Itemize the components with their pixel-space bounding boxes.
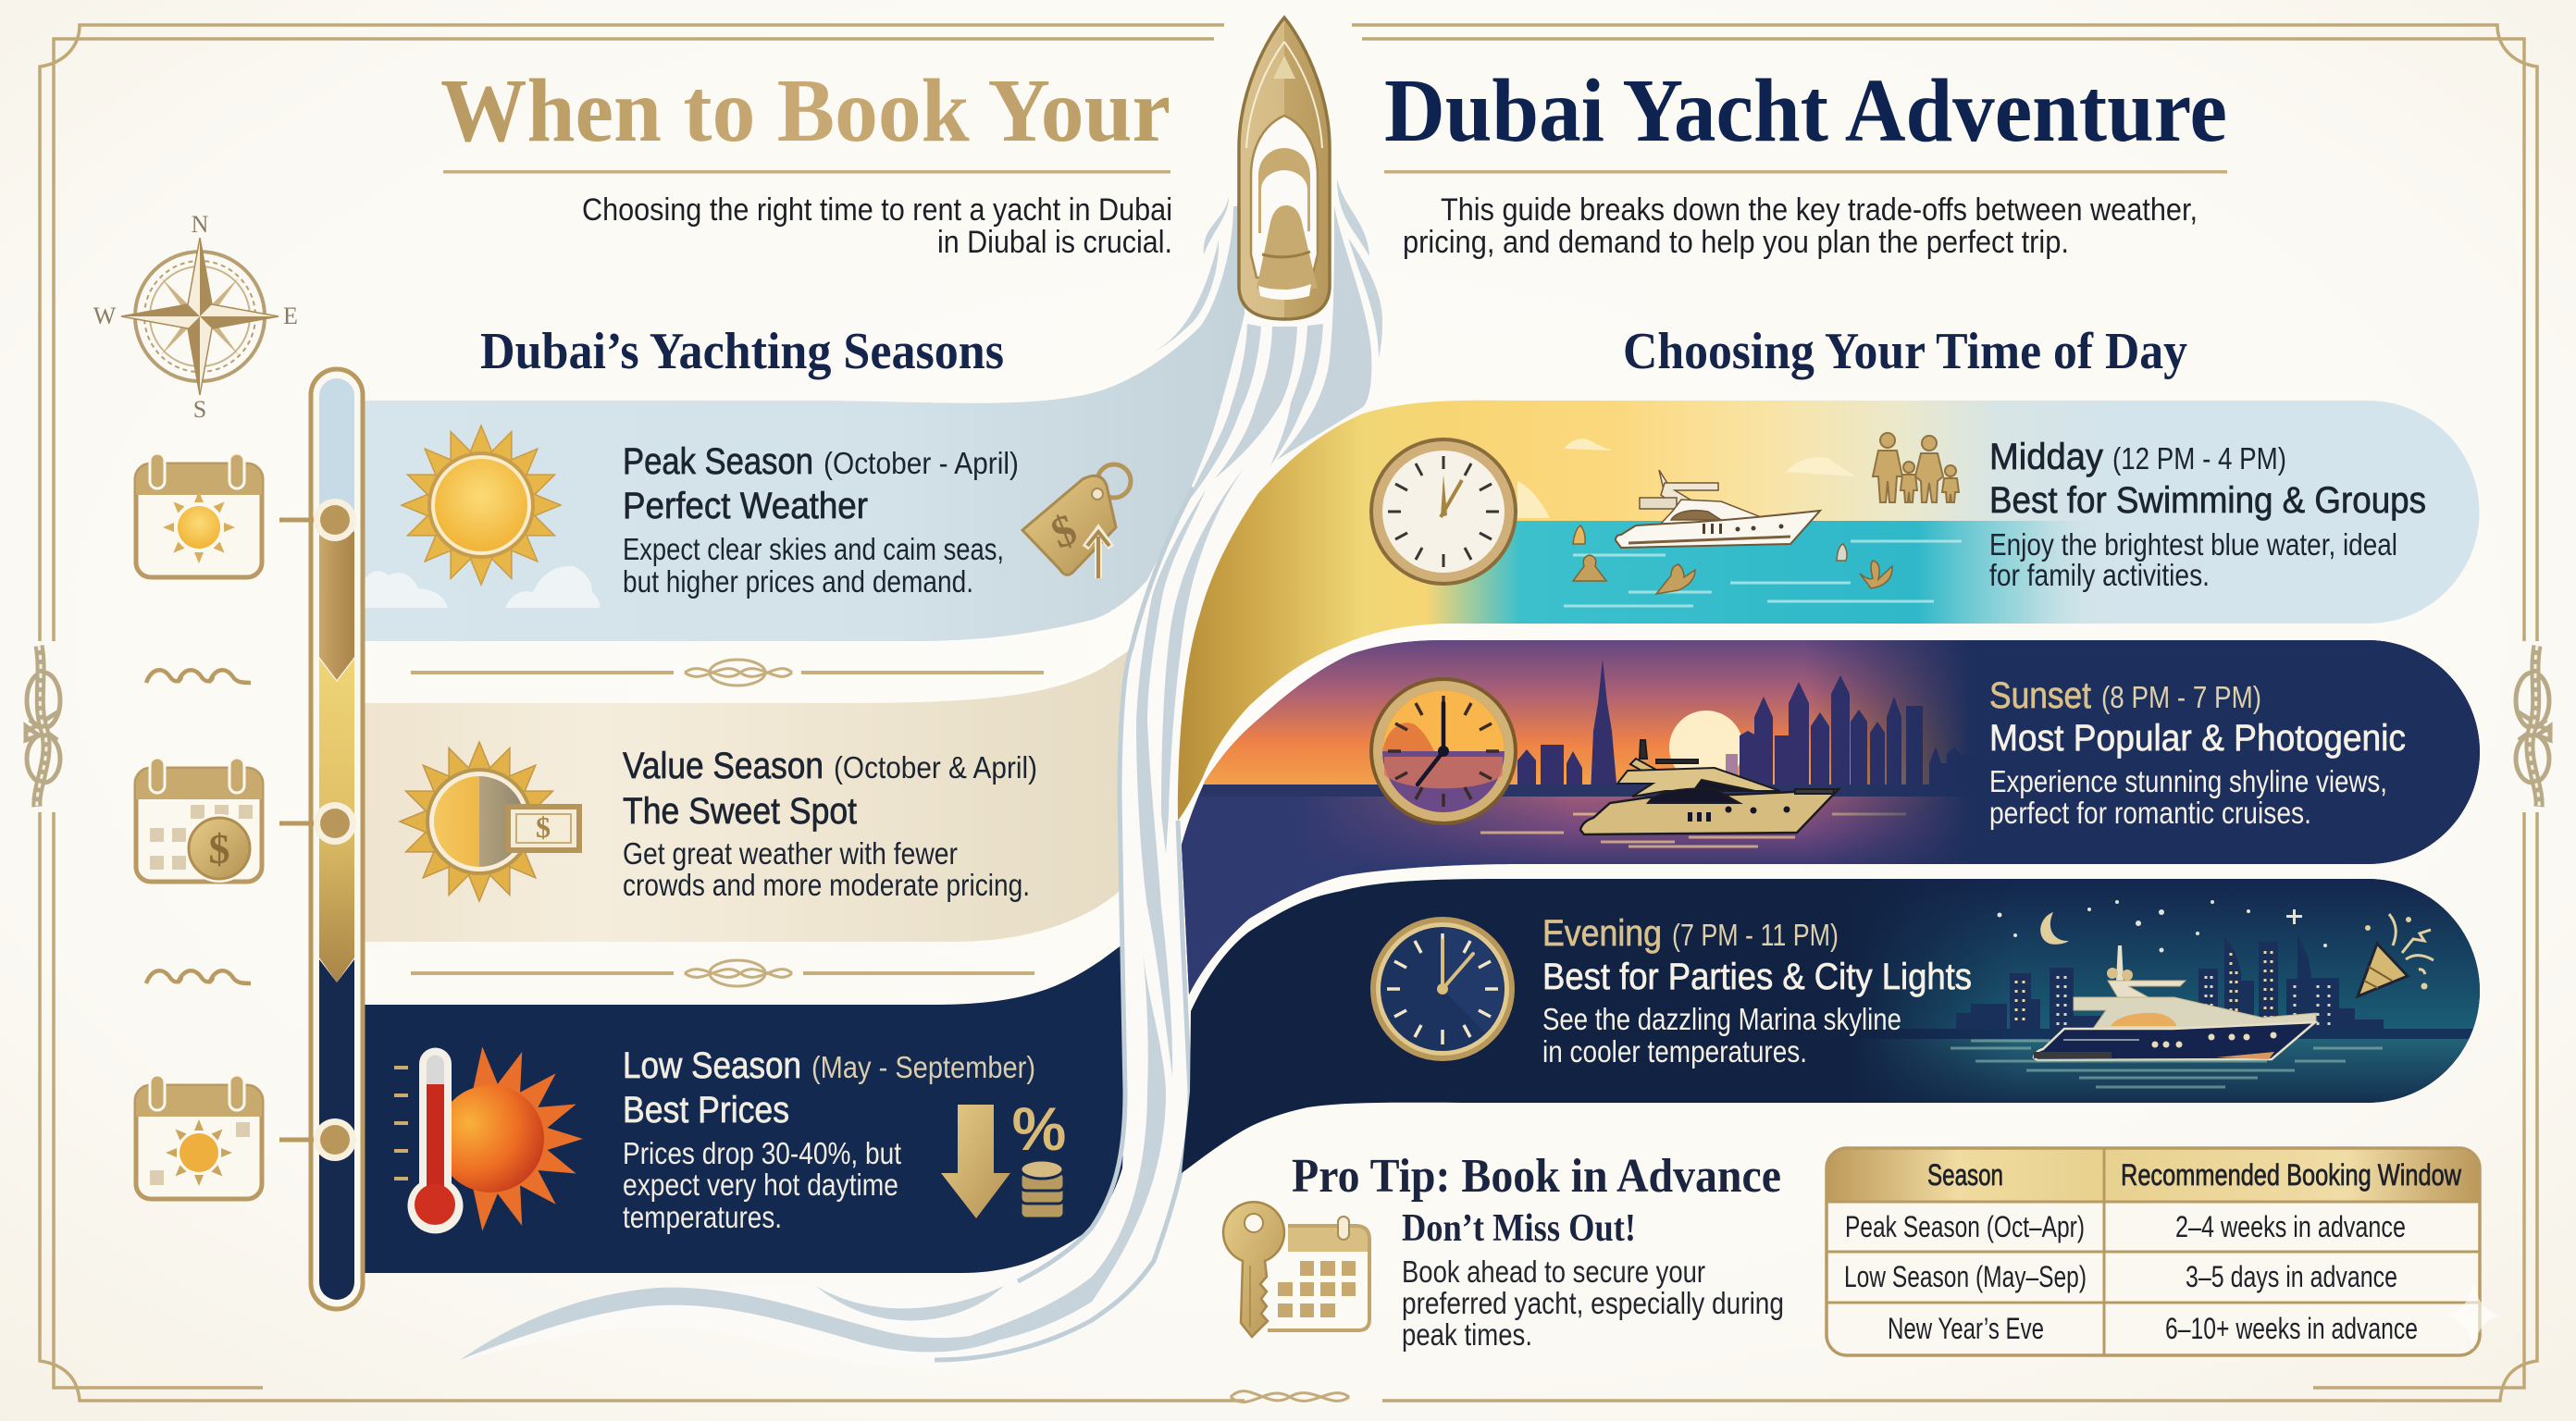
title: left part: When to Book Your [440,61,1170,161]
text: sunset: Most Popular & Photogenic [1989,718,2406,759]
text: evening: See the dazzling Marina skyline [1542,1002,1901,1036]
table header: Season [1927,1158,2003,1192]
table: booking windows [1827,1148,2480,1355]
text: midday: Enjoy the brightest blue water, ideal [1989,527,2397,562]
icon: half sun with banknote [400,742,579,901]
text: evening: Best for Parties & City Lights [1542,957,1972,997]
icon: sun [402,426,561,585]
text: peak season: Expect clear skies and caim seas, [623,532,1004,566]
text: midday: Midday [1989,437,2103,477]
table rows: 3–5 days in advance [2186,1260,2397,1293]
title: right part: Dubai Yacht Adventure [1384,61,2227,161]
intro text: left [582,192,1172,260]
panel: sunset [1180,640,2480,999]
text: low season: temperatures. [623,1200,782,1234]
icon: price drop: % [1012,1094,1066,1163]
text: sunset: Experience stunning shyline views, [1989,764,2387,798]
table header: Recommended Booking Window [2121,1158,2462,1192]
icon: key [1223,1202,1284,1337]
panel: peak season [363,206,1245,641]
text: value season: The Sweet Spot [623,791,857,832]
yacht: night [2034,945,2316,1060]
pro tip section [1223,1150,1784,1352]
illustration: night marina [1951,900,2384,1087]
decorative waves: upper [146,670,251,683]
title rule: left [443,170,1170,174]
illustration: dusk skyline [1517,659,1971,794]
divider knot: lower [411,960,1034,986]
text: pro tip body: preferred yacht, especially during [1402,1286,1784,1320]
text: don't miss out: Don’t Miss Out! [1402,1207,1636,1250]
text: low season [623,1045,1035,1234]
text: midday: Best for Swimming & Groups [1989,480,2426,521]
timeline node: peak [279,499,356,541]
icon: calendar with coin: $ [209,825,229,872]
text: sunset: (8 PM - 7 PM) [2101,680,2261,714]
stern stripes [1184,324,1261,506]
text: peak season: (October - April) [824,446,1019,480]
icon: midday clock [1369,438,1517,586]
text: low season: Prices drop 30-40%, but [623,1136,901,1170]
text: pro tip body [1402,1254,1784,1352]
icon: half sun with banknote: $ [536,810,551,844]
icon: compass rose: S [193,396,206,423]
text: evening: (7 PM - 11 PM) [1672,918,1839,952]
timeline node: value [279,802,356,845]
table rows [1844,1210,2418,1345]
table rows: New Year’s Eve [1888,1312,2044,1345]
heading: seasons: Dubai’s Yachting Seasons [480,323,1004,380]
swimmers [1573,525,1892,594]
icon: compass rose: E [283,303,298,329]
table rows: Peak Season (Oct–Apr) [1845,1210,2085,1243]
decorative waves: lower [146,970,251,983]
sparkle mark [2446,1281,2500,1350]
wake wing: right [1277,206,1371,460]
heading: time of day: Choosing Your Time of Day [1623,323,2187,380]
text: peak season: Perfect Weather [623,486,868,526]
table rows: 6–10+ weeks in advance [2165,1312,2418,1345]
rope knot: bottom border [1231,1391,1349,1402]
text: evening: Evening [1542,913,1662,954]
icon: calendar behind key [1268,1217,1369,1330]
intro text: left: Choosing the right time to rent a yacht in Dubai [582,192,1172,228]
rope knot: right border [2516,646,2550,807]
wake wing: left crescents [1154,241,1219,352]
intro text: right [1403,192,2198,260]
text: low season: Low Season [623,1045,801,1086]
intro text: right: pricing, and demand to help you plan the perfect trip. [1403,225,2069,260]
table header [1927,1158,2462,1192]
text: sunset: perfect for romantic cruises. [1989,796,2311,830]
text: sunset: Sunset [1989,675,2091,716]
panel: low season [363,936,1133,1273]
icon: calendar with sun [136,453,262,577]
text: evening [1542,913,1972,1069]
yacht: gold [1580,740,1839,834]
icon: calendar with coin [136,758,262,883]
panel: evening [1182,879,2480,1173]
icon: sunset clock [1369,677,1517,825]
text: peak season [623,441,1019,599]
icon: family [1873,433,1959,502]
panel: midday [1178,401,2480,821]
text: low season: expect very hot daytime [623,1168,898,1202]
icon: compass rose [93,211,298,423]
text: peak season: Peak Season [623,441,813,482]
rope knot: left border [26,646,60,807]
table rows: Low Season (May–Sep) [1844,1260,2087,1293]
clouds [363,566,600,608]
text: value season [623,746,1037,902]
panel: value season [363,648,1133,942]
yacht wake ribbons [460,179,1388,1369]
table rows: 2–4 weeks in advance [2175,1210,2406,1243]
icon: calendar with small sun [136,1075,262,1199]
heading: pro tip: Pro Tip: Book in Advance [1292,1150,1781,1203]
icon: party popper [2358,914,2434,996]
text: low season: (May - September) [811,1050,1035,1084]
text: value season: crowds and more moderate pricing. [623,868,1030,902]
timeline node: low [279,1118,356,1161]
timeline bar [279,369,363,1309]
icon: compass rose: N [192,211,209,238]
yacht: white [1616,470,1820,548]
bottom wave strands [460,1288,1046,1360]
icon: price tag [1022,464,1131,578]
text: low season: Best Prices [623,1090,789,1131]
title rule: right [1384,170,2227,174]
icon: yacht top view [1239,18,1330,319]
intro text: right: This guide breaks down the key trade-offs between weather, [1441,192,2198,228]
text: value season: Value Season [623,746,824,786]
text: midday [1989,437,2426,592]
icon: price tag: $ [1045,504,1084,559]
icon: price drop [941,1094,1066,1218]
text: pro tip body: peak times. [1402,1317,1532,1352]
intro text: left: in Diubal is crucial. [937,225,1172,260]
text: value season: (October & April) [834,750,1037,785]
icon: compass rose: W [93,303,117,329]
divider knot: upper [411,660,1044,686]
text: evening: in cooler temperatures. [1542,1034,1807,1069]
icon: hot sun and thermometer [394,1045,583,1233]
text: midday: (12 PM - 4 PM) [2112,441,2286,476]
icon: evening clock [1370,917,1515,1061]
text: value season: Get great weather with fewer [623,836,958,871]
text: midday: for family activities. [1989,558,2210,592]
text: peak season: but higher prices and demand. [623,564,973,599]
text: pro tip body: Book ahead to secure your [1402,1254,1705,1289]
text: sunset [1989,675,2406,830]
